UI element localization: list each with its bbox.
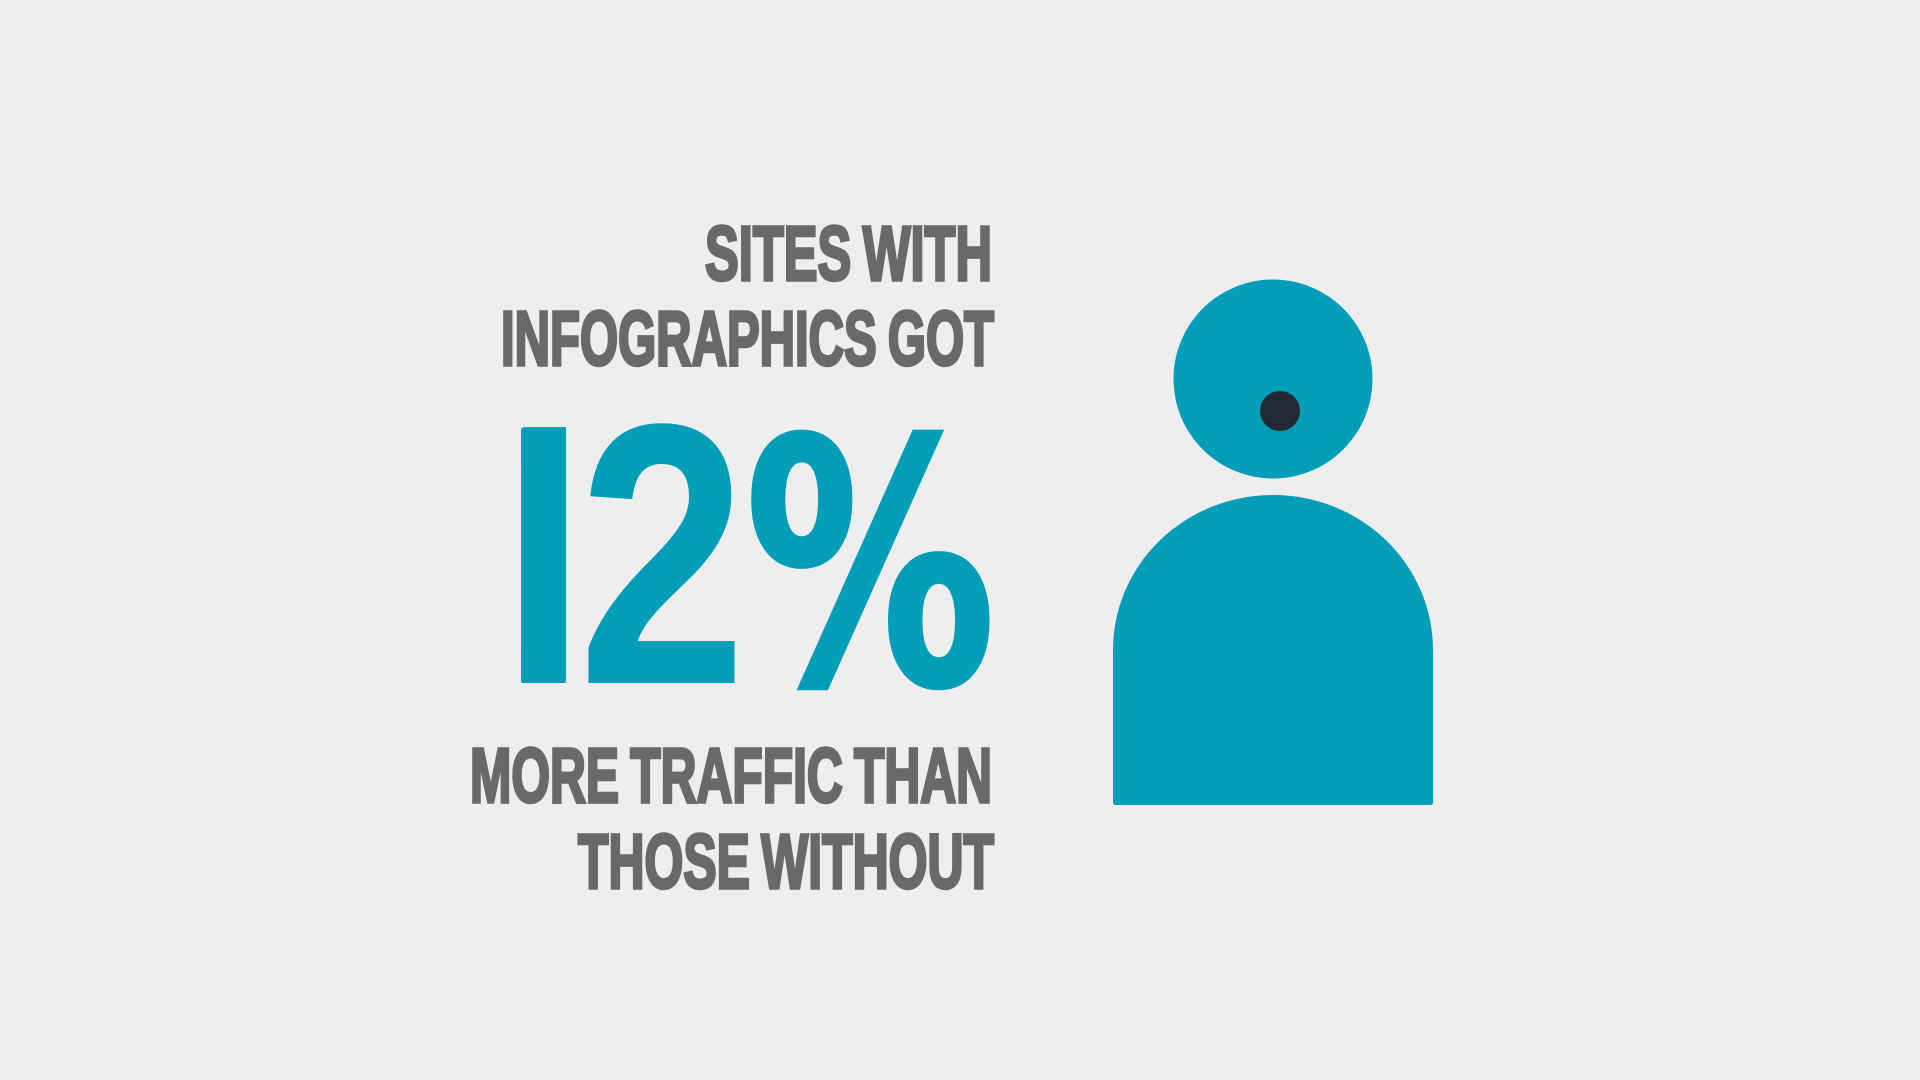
person body	[1113, 495, 1433, 805]
big number: 12%: 2	[578, 346, 747, 762]
big number: 12%: 1	[445, 348, 627, 763]
person eye dot	[1260, 391, 1300, 431]
text: more traffic than those without	[470, 733, 994, 905]
text: more traffic than those without: MORE TRAFFIC THAN	[470, 733, 992, 819]
person head	[1174, 280, 1372, 478]
text: more traffic than those without: THOSE WITHOUT	[578, 819, 994, 905]
icon: person	[1113, 280, 1433, 805]
big number: 12%	[521, 423, 990, 690]
heading: sites with infographics got: INFOGRAPHICS GOT	[501, 296, 994, 382]
heading: sites with infographics got: SITES WITH	[705, 211, 992, 297]
big number: 12%: %	[745, 370, 996, 764]
heading: sites with infographics got	[501, 211, 994, 382]
